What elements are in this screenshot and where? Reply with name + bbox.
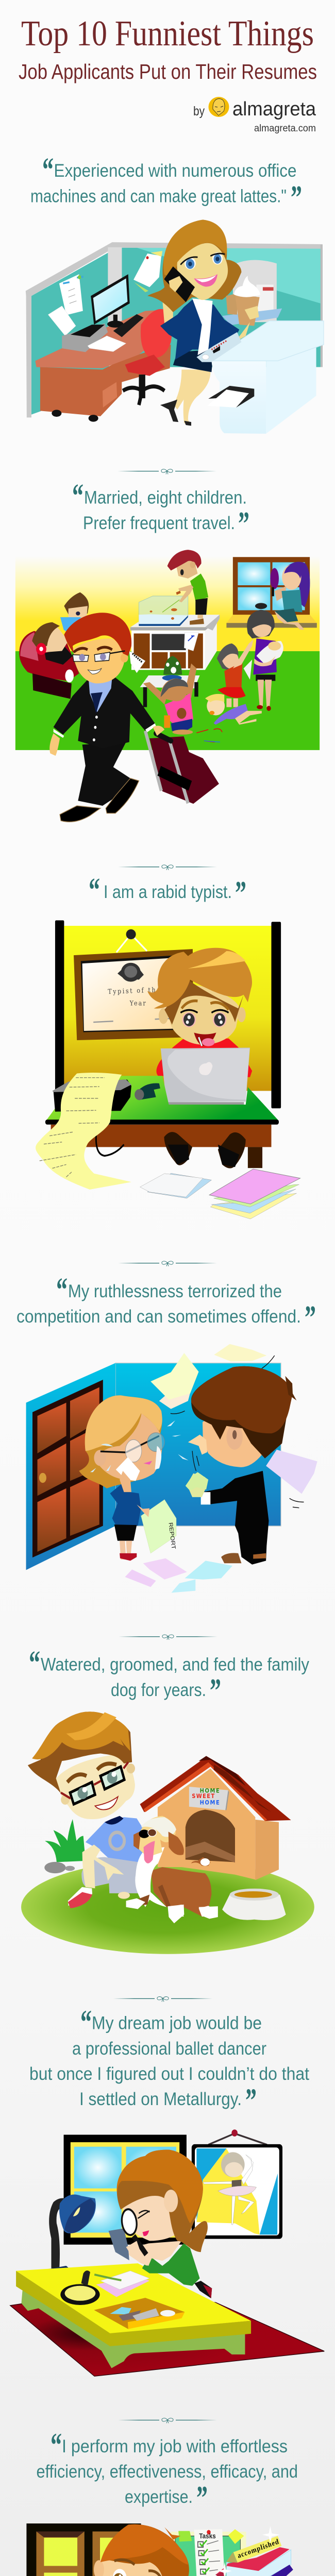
byline logo xyxy=(193,97,316,134)
quote 4: ” xyxy=(305,1299,316,1336)
quote 4: competition and can sometimes offend. xyxy=(16,1307,301,1327)
fish tank xyxy=(139,596,188,626)
window xyxy=(26,2523,141,2576)
crying employee xyxy=(79,1395,177,1561)
divider 5 xyxy=(119,1635,217,1640)
quote 4: My ruthlessness terrorized the xyxy=(68,1281,282,1301)
cabinet and TV xyxy=(129,615,220,673)
dog house xyxy=(140,1756,291,1880)
byline logo: almagreta.com xyxy=(254,123,316,134)
flying papers xyxy=(150,1344,317,1494)
quote 1 xyxy=(30,151,302,216)
window xyxy=(64,2134,187,2245)
quote 7: efficiency, effectiveness, efficacy, and xyxy=(36,2462,298,2482)
quote 1: “ xyxy=(42,151,54,189)
scene 2: family and traveling father xyxy=(15,550,320,822)
quote 6: a professional ballet dancer xyxy=(72,2039,266,2059)
sparkle xyxy=(103,2574,125,2576)
trousers xyxy=(78,742,130,806)
scene 1: office latte woman xyxy=(26,220,324,434)
wall and posts xyxy=(55,920,281,1108)
quote 6 xyxy=(29,2003,309,2120)
boy xyxy=(28,1711,145,1908)
quote 4: “ xyxy=(56,1271,68,1309)
quote 7: ” xyxy=(196,2480,208,2517)
smile xyxy=(194,274,217,286)
legs xyxy=(174,369,210,423)
telephone xyxy=(137,1083,160,1099)
quote 3 xyxy=(89,871,246,912)
sofa and listener xyxy=(19,622,79,699)
coffee cups xyxy=(226,294,237,315)
quote 7: “ xyxy=(51,2427,62,2464)
quote 1: Experienced with numerous office xyxy=(54,161,297,181)
crying employee: REPORT xyxy=(167,1522,177,1550)
typist desk xyxy=(36,1073,300,1219)
scene 3: rabid typist xyxy=(55,920,281,1108)
quote 5: ” xyxy=(210,1672,221,1709)
woman with loupe xyxy=(109,2150,212,2298)
quote 6: “ xyxy=(80,2003,92,2041)
quote 5: dog for years. xyxy=(111,1680,206,1700)
divider 2 xyxy=(118,469,216,474)
book stack xyxy=(217,2550,291,2576)
monitor and keyboard xyxy=(91,274,144,337)
board and tasks xyxy=(171,2529,246,2576)
icon: almagreta face xyxy=(208,97,229,117)
door xyxy=(32,1380,103,1557)
quote 3: ” xyxy=(235,875,246,912)
ballerina picture xyxy=(192,2129,282,2239)
crying girl xyxy=(217,640,253,707)
rug xyxy=(10,2291,324,2376)
byline logo: by xyxy=(193,104,205,118)
window xyxy=(226,557,317,628)
folders and accomplished sign: accomplished xyxy=(237,2537,280,2560)
boy with bowl xyxy=(60,592,89,632)
quote 6: I settled on Metallurgy. xyxy=(79,2089,242,2109)
dog xyxy=(126,1816,218,1923)
paper tray and printer xyxy=(48,306,126,352)
quote 5: Watered, groomed, and fed the family xyxy=(41,1655,309,1675)
teen with hand mirror xyxy=(270,562,310,630)
divider 3 xyxy=(118,865,217,870)
scene 5: boy and dog xyxy=(21,1711,314,1954)
scene 7: accomplished pro xyxy=(23,2523,293,2576)
board and tasks: Tasks xyxy=(199,2532,216,2540)
divider 6 xyxy=(113,1997,212,2002)
head xyxy=(56,1753,135,1819)
grass island xyxy=(21,1860,314,1954)
lamp xyxy=(38,2194,96,2281)
angry boss xyxy=(186,1366,296,1565)
cubicle walls xyxy=(26,242,323,417)
woman xyxy=(147,220,260,426)
folders and accomplished sign xyxy=(215,2536,293,2576)
desk xyxy=(35,310,171,422)
dog house: HOME xyxy=(200,1787,220,1794)
divider 4 xyxy=(118,1261,217,1266)
quote 4 xyxy=(16,1271,316,1336)
quote 5: “ xyxy=(29,1644,40,1682)
quote 6: ” xyxy=(245,2082,257,2120)
cheering girl xyxy=(143,664,196,735)
eyes xyxy=(180,1010,229,1027)
phone xyxy=(164,266,195,302)
hair back xyxy=(147,220,241,312)
quote 1: machines and can make great lattes." xyxy=(30,187,287,207)
quote 7: I perform my job with effortless xyxy=(62,2436,288,2456)
desk xyxy=(16,2263,251,2368)
sparkles xyxy=(218,2526,285,2576)
quote 2: ” xyxy=(238,505,249,543)
quote 6: but once I figured out I couldn’t do that xyxy=(29,2064,309,2084)
divider 7 xyxy=(118,2418,217,2423)
boy at tank xyxy=(167,550,208,625)
room background xyxy=(15,556,320,750)
loose papers xyxy=(147,1173,211,1198)
quote 5 xyxy=(29,1644,309,1709)
bush and rock xyxy=(44,1819,86,1873)
printer xyxy=(54,1080,131,1112)
back copier xyxy=(222,260,282,325)
quote 1: ” xyxy=(291,179,302,216)
quote 7 xyxy=(36,2427,298,2517)
front copier xyxy=(196,321,324,434)
pro boy xyxy=(60,2524,189,2576)
certificate: Year xyxy=(129,999,146,1007)
quote 6: My dream job would be xyxy=(92,2013,262,2033)
scene 4: ruthless boss xyxy=(26,1344,317,1592)
quote 2: Prefer frequent travel. xyxy=(83,513,235,533)
jacket xyxy=(54,676,155,748)
typist boy xyxy=(147,948,252,1077)
quote 2: “ xyxy=(72,477,83,515)
quote 2 xyxy=(72,477,249,543)
quote 3: I am a rabid typist. xyxy=(104,882,232,902)
certificate: Typist of the xyxy=(108,986,160,996)
head xyxy=(74,638,124,683)
feet xyxy=(164,1132,192,1165)
father traveling xyxy=(49,613,219,822)
stacked folders xyxy=(210,1193,296,1219)
mother with baby xyxy=(247,603,283,711)
scene 6: dream ballet xyxy=(10,2129,324,2376)
wall notes xyxy=(59,251,162,315)
laptop xyxy=(161,1048,250,1105)
arm to phone xyxy=(162,290,184,325)
suitcase xyxy=(149,736,219,804)
coffee table xyxy=(140,656,200,707)
skirt xyxy=(173,350,214,372)
crawling baby xyxy=(196,694,262,742)
certificate xyxy=(74,929,193,1040)
paper roll xyxy=(36,1073,131,1190)
food bowl xyxy=(222,1889,286,1920)
quote 2: Married, eight children. xyxy=(84,487,247,508)
dog house: SWEET xyxy=(192,1793,215,1800)
byline logo: almagreta xyxy=(232,98,316,120)
office chair xyxy=(123,309,172,405)
eyes xyxy=(180,252,225,269)
quote 3: “ xyxy=(89,871,100,909)
face xyxy=(177,243,228,300)
jacket xyxy=(160,300,239,360)
glasses xyxy=(61,1762,128,1804)
dog house: HOME xyxy=(200,1799,220,1806)
quote 7: expertise. xyxy=(125,2487,193,2507)
floor papers xyxy=(125,1498,304,1592)
wall xyxy=(26,1363,281,1570)
